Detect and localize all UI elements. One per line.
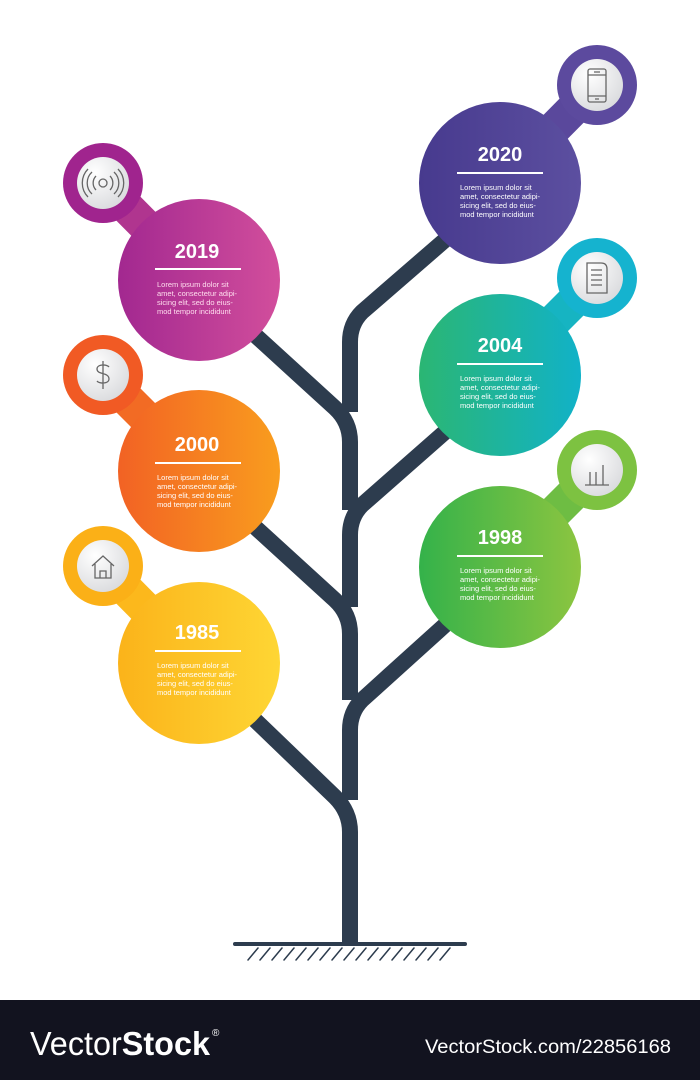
footer: VectorStock.com/22856168 — [425, 1037, 671, 1058]
node: 2020: sicing elit, sed do eius- — [460, 201, 536, 210]
node: 1985: sicing elit, sed do eius- — [157, 679, 233, 688]
node: 2000: mod tempor incididunt — [157, 500, 232, 509]
node: 2019: mod tempor incididunt — [157, 307, 232, 316]
footer: VectorStock — [30, 1025, 211, 1062]
ground — [235, 944, 465, 960]
node: 2004: sicing elit, sed do eius- — [460, 392, 536, 401]
node: 2004 — [419, 238, 637, 456]
node: 1998 — [419, 430, 637, 648]
node: 2020 — [419, 45, 637, 264]
tree trunk and branches — [255, 240, 445, 943]
node: 2019 — [63, 143, 280, 361]
node: 2004: Lorem ipsum dolor sit — [460, 374, 533, 383]
node: 2019: sicing elit, sed do eius- — [157, 298, 233, 307]
icon: phone — [571, 59, 623, 111]
node: 2020: 2020 — [478, 144, 522, 166]
icon: bar chart — [571, 444, 623, 496]
node: 2004: mod tempor incididunt — [460, 401, 535, 410]
node: 1985 — [63, 526, 280, 744]
icon: signal — [77, 157, 129, 209]
icon: document — [571, 252, 623, 304]
node: 1998: Lorem ipsum dolor sit — [460, 566, 533, 575]
node: 2004: 2004 — [478, 335, 523, 357]
footer — [0, 1000, 700, 1080]
icon: house — [77, 540, 129, 592]
icon: dollar — [77, 349, 129, 401]
node: 1998: sicing elit, sed do eius- — [460, 584, 536, 593]
node: 1985: 1985 — [175, 622, 219, 644]
node: 2019: amet, consectetur adipi- — [157, 289, 238, 298]
node: 1985: amet, consectetur adipi- — [157, 670, 238, 679]
node: 1998: amet, consectetur adipi- — [460, 575, 541, 584]
node: 2019: Lorem ipsum dolor sit — [157, 280, 230, 289]
node: 2000: sicing elit, sed do eius- — [157, 491, 233, 500]
node: 2019: 2019 — [175, 241, 219, 263]
node: 2020: Lorem ipsum dolor sit — [460, 183, 533, 192]
node: 2000: Lorem ipsum dolor sit — [157, 473, 230, 482]
node: 1998: 1998 — [478, 527, 522, 549]
node: 2020: amet, consectetur adipi- — [460, 192, 541, 201]
node: 2000: 2000 — [175, 434, 219, 456]
node: 2000 — [63, 335, 280, 552]
node: 2004: amet, consectetur adipi- — [460, 383, 541, 392]
node: 2000: amet, consectetur adipi- — [157, 482, 238, 491]
node: 2020: mod tempor incididunt — [460, 210, 535, 219]
node: 1998: mod tempor incididunt — [460, 593, 535, 602]
node: 1985: mod tempor incididunt — [157, 688, 232, 697]
node: 1985: Lorem ipsum dolor sit — [157, 661, 230, 670]
footer: ® — [212, 1028, 220, 1039]
